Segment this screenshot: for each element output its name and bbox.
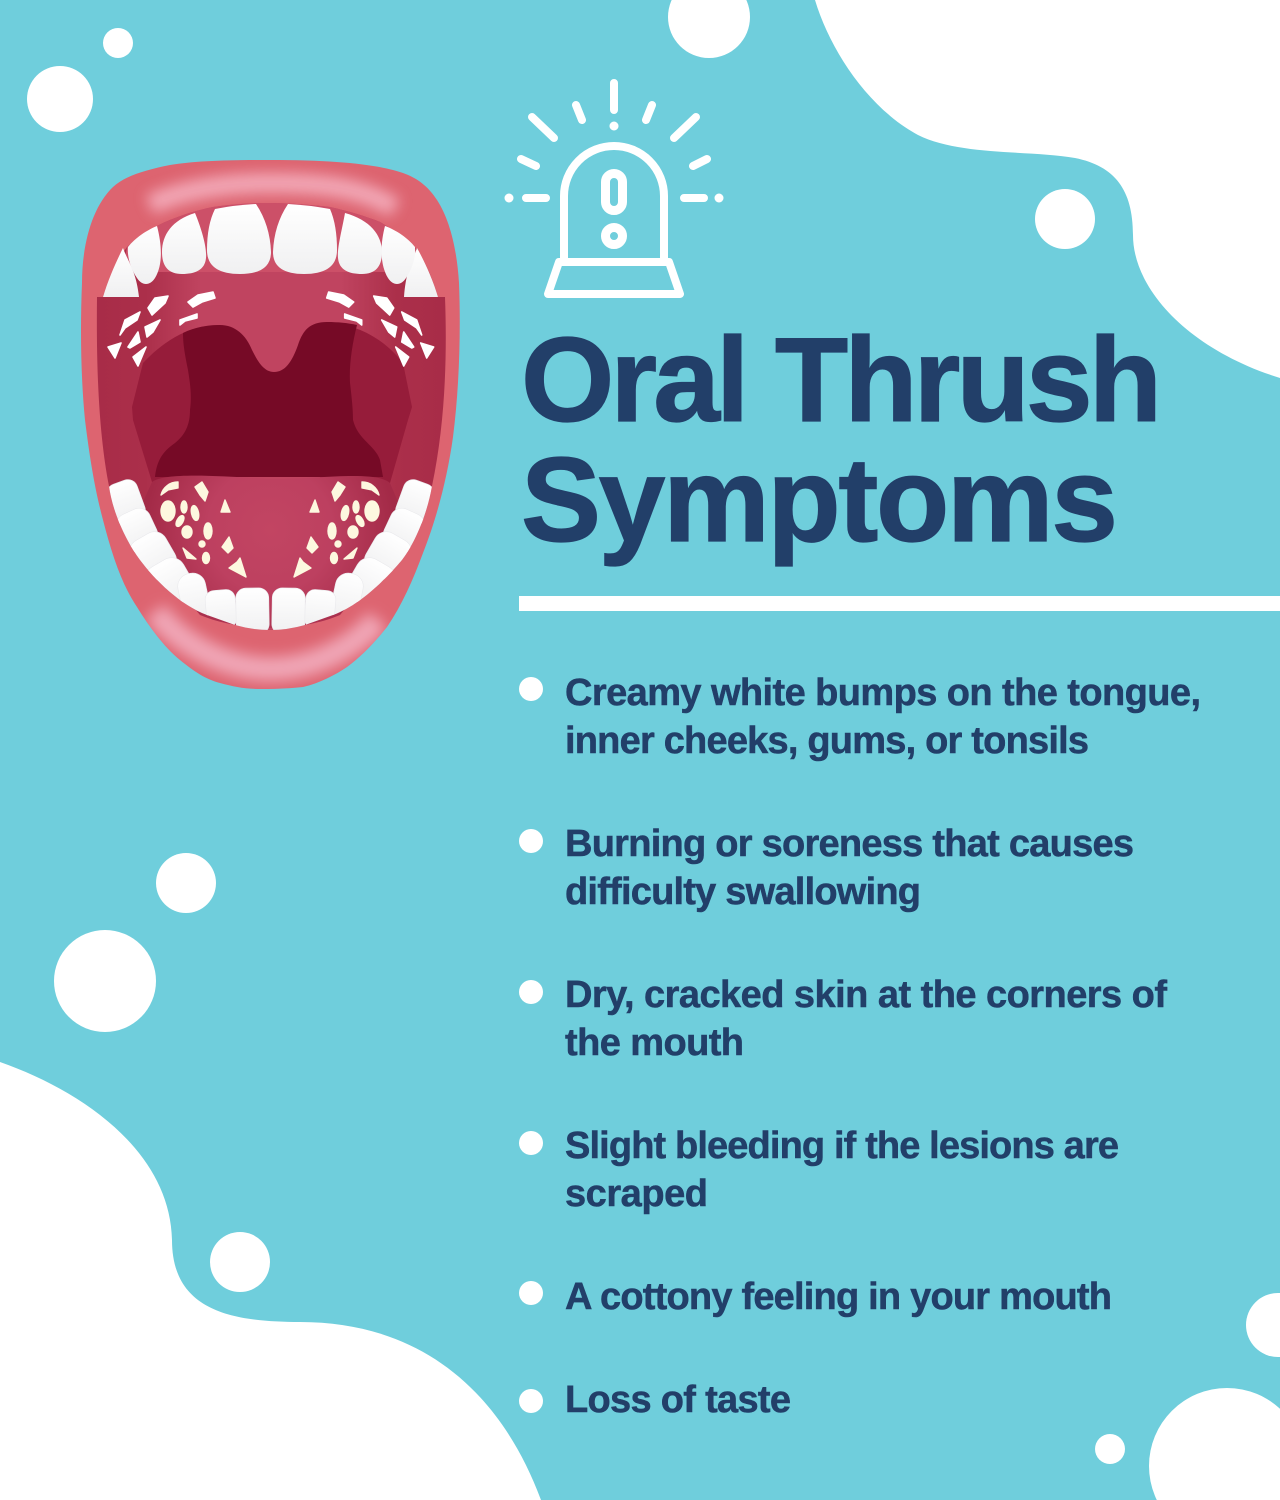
title: Oral Thrush bbox=[521, 313, 1162, 447]
illustration: open mouth with thrush bbox=[70, 150, 470, 700]
symptom: slight bleeding: Slight bleeding if the lesions are bbox=[565, 1125, 1119, 1167]
white patches: tongue bbox=[161, 482, 379, 577]
tongue bbox=[130, 476, 410, 628]
symptom: burning or soreness: difficulty swallowing bbox=[565, 871, 921, 913]
gum above teeth bbox=[122, 203, 420, 272]
symptom: creamy white bumps bbox=[519, 672, 1201, 762]
throat side tonsils bbox=[132, 325, 225, 482]
lips bbox=[70, 150, 470, 700]
lower teeth bbox=[104, 477, 437, 634]
symptom: burning or soreness: Burning or soreness that causes bbox=[565, 823, 1134, 865]
symptom: slight bleeding bbox=[519, 1125, 1119, 1215]
symptom: creamy white bumps: inner cheeks, gums, or tonsils bbox=[565, 720, 1089, 762]
title bbox=[521, 313, 1162, 567]
blob: bottom left bbox=[0, 1062, 541, 1500]
divider bbox=[519, 596, 1280, 611]
symptom: loss of taste: Loss of taste bbox=[565, 1379, 791, 1421]
mouth cavity bbox=[97, 203, 446, 630]
white patches: palate bbox=[108, 292, 434, 366]
upper teeth bbox=[103, 204, 438, 297]
icon: alarm siren bbox=[504, 83, 724, 294]
title: Symptoms bbox=[521, 433, 1118, 567]
symptom: creamy white bumps: Creamy white bumps on the tongue, bbox=[565, 672, 1201, 714]
blob: top right bbox=[815, 0, 1280, 378]
symptom: dry cracked skin: the mouth bbox=[565, 1022, 744, 1064]
symptom: dry cracked skin: Dry, cracked skin at the corners of bbox=[565, 974, 1167, 1016]
symptom: cottony feeling: A cottony feeling in your mouth bbox=[565, 1276, 1112, 1318]
symptom: slight bleeding: scraped bbox=[565, 1173, 708, 1215]
symptom: dry cracked skin bbox=[519, 974, 1167, 1064]
throat and uvula opening bbox=[155, 322, 383, 477]
symptom: burning or soreness bbox=[519, 823, 1134, 913]
